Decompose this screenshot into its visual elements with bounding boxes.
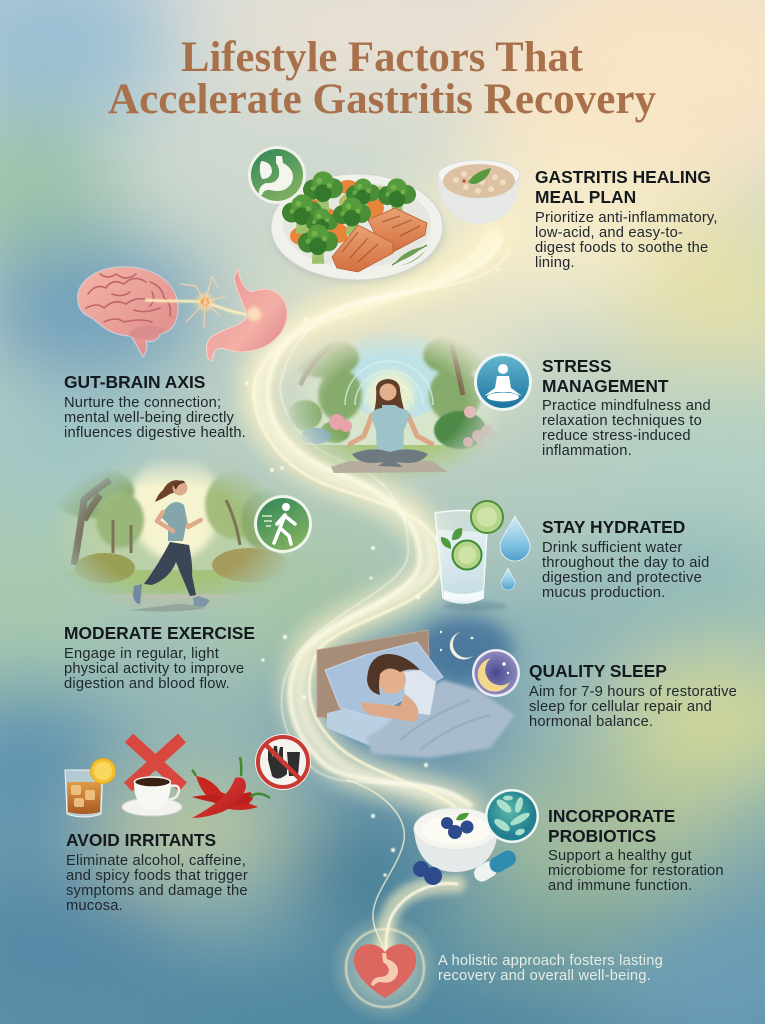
illustration: salmon and vegetable plate bbox=[271, 171, 444, 282]
text: stress management: Practice mindfulness and bbox=[542, 398, 711, 414]
illustration: yogurt, blueberries and capsule bbox=[413, 808, 519, 885]
heading: stress management: MANAGEMENT bbox=[542, 376, 669, 396]
text: stay hydrated: digestion and protective bbox=[542, 570, 702, 586]
text: avoid irritants: and spicy foods that trigger bbox=[66, 868, 248, 884]
text: probiotics bbox=[548, 848, 724, 894]
title bbox=[108, 34, 656, 123]
heading: stress management bbox=[542, 356, 669, 396]
text: moderate exercise: physical activity to improve bbox=[64, 661, 244, 677]
title: Lifestyle Factors That bbox=[181, 34, 584, 81]
section: avoid irritants bbox=[65, 734, 311, 914]
heading: gut-brain axis: GUT-BRAIN AXIS bbox=[64, 372, 205, 392]
illustration: woman meditating in a garden bbox=[288, 333, 492, 480]
icon: prohibition sign bbox=[255, 734, 311, 790]
icon: gut bacteria bbox=[485, 789, 539, 843]
heading: quality sleep: QUALITY SLEEP bbox=[529, 661, 667, 681]
text: closing statement: recovery and overall well-being. bbox=[438, 968, 651, 984]
section: meal plan bbox=[248, 146, 718, 282]
heading: moderate exercise: MODERATE EXERCISE bbox=[64, 623, 255, 643]
text: moderate exercise: digestion and blood flow. bbox=[64, 676, 230, 692]
icon: stomach leaf bbox=[248, 146, 306, 204]
heading: meal plan: GASTRITIS HEALING bbox=[535, 167, 711, 187]
text: stress management: relaxation techniques to bbox=[542, 413, 702, 429]
illustration: woman sleeping in bed bbox=[317, 616, 515, 758]
icon: water drops bbox=[500, 516, 530, 590]
text: meal plan: digest foods to soothe the bbox=[535, 240, 708, 256]
heading: stay hydrated: STAY HYDRATED bbox=[542, 517, 685, 537]
illustration: water glass with cucumber bbox=[435, 501, 507, 611]
text: stress management: inflammation. bbox=[542, 443, 632, 459]
section: stay hydrated bbox=[435, 501, 710, 611]
text: stay hydrated bbox=[542, 540, 710, 601]
section: probiotics bbox=[413, 789, 724, 894]
text: probiotics: microbiome for restoration bbox=[548, 863, 724, 879]
text: avoid irritants: mucosa. bbox=[66, 898, 123, 914]
heading: probiotics: PROBIOTICS bbox=[548, 826, 656, 846]
heading: probiotics: INCORPORATE bbox=[548, 806, 675, 826]
text: gut-brain axis bbox=[64, 395, 246, 441]
text: meal plan bbox=[535, 210, 718, 271]
text: stay hydrated: mucus production. bbox=[542, 585, 665, 601]
illustration: oatmeal bowl bbox=[438, 160, 520, 224]
text: quality sleep bbox=[529, 684, 737, 730]
text: quality sleep: sleep for cellular repair and bbox=[529, 699, 712, 715]
illustration: brain connected to stomach bbox=[78, 267, 287, 361]
section: quality sleep bbox=[317, 616, 737, 758]
text: avoid irritants: Eliminate alcohol, caffeine, bbox=[66, 853, 246, 869]
text: stress management bbox=[542, 398, 711, 459]
text: quality sleep: hormonal balance. bbox=[529, 714, 653, 730]
icon: meditation bbox=[474, 353, 532, 411]
text: meal plan: Prioritize anti-inflammatory, bbox=[535, 210, 718, 226]
text: probiotics: and immune function. bbox=[548, 878, 692, 894]
text: moderate exercise bbox=[64, 646, 244, 692]
text: avoid irritants bbox=[66, 853, 248, 914]
icon: glowing heart with stomach bbox=[329, 912, 441, 1024]
text: moderate exercise: Engage in regular, light bbox=[64, 646, 219, 662]
text: closing statement: A holistic approach fosters lasting bbox=[438, 953, 663, 969]
icon: walking person bbox=[254, 495, 312, 553]
text: closing statement bbox=[438, 953, 663, 984]
text: quality sleep: Aim for 7-9 hours of restorative bbox=[529, 684, 737, 700]
heading: avoid irritants: AVOID IRRITANTS bbox=[66, 830, 216, 850]
text: gut-brain axis: Nurture the connection; bbox=[64, 395, 221, 411]
text: stay hydrated: Drink sufficient water bbox=[542, 540, 682, 556]
text: probiotics: Support a healthy gut bbox=[548, 848, 692, 864]
illustration: whisky, coffee, chili with red cross bbox=[65, 738, 270, 818]
text: meal plan: low-acid, and easy-to- bbox=[535, 225, 683, 241]
heading: probiotics bbox=[548, 806, 675, 846]
heading: meal plan: MEAL PLAN bbox=[535, 187, 636, 207]
text: gut-brain axis: mental well-being directly bbox=[64, 410, 235, 426]
section: gut-brain axis bbox=[64, 267, 287, 441]
text: meal plan: lining. bbox=[535, 255, 575, 271]
section: conclusion bbox=[329, 912, 663, 1024]
text: stay hydrated: throughout the day to aid bbox=[542, 555, 710, 571]
glowing healing path bbox=[245, 235, 510, 952]
text: gut-brain axis: influences digestive health. bbox=[64, 425, 246, 441]
section: moderate exercise bbox=[58, 458, 312, 691]
text: avoid irritants: symptoms and damage the bbox=[66, 883, 248, 899]
text: stress management: reduce stress-induced bbox=[542, 428, 691, 444]
title: Accelerate Gastritis Recovery bbox=[108, 76, 656, 123]
heading: stress management: STRESS bbox=[542, 356, 612, 376]
icon: moon and stars bbox=[472, 649, 520, 697]
illustration: woman jogging in park bbox=[58, 458, 287, 612]
heading: meal plan bbox=[535, 167, 711, 207]
section: stress management bbox=[288, 333, 710, 480]
